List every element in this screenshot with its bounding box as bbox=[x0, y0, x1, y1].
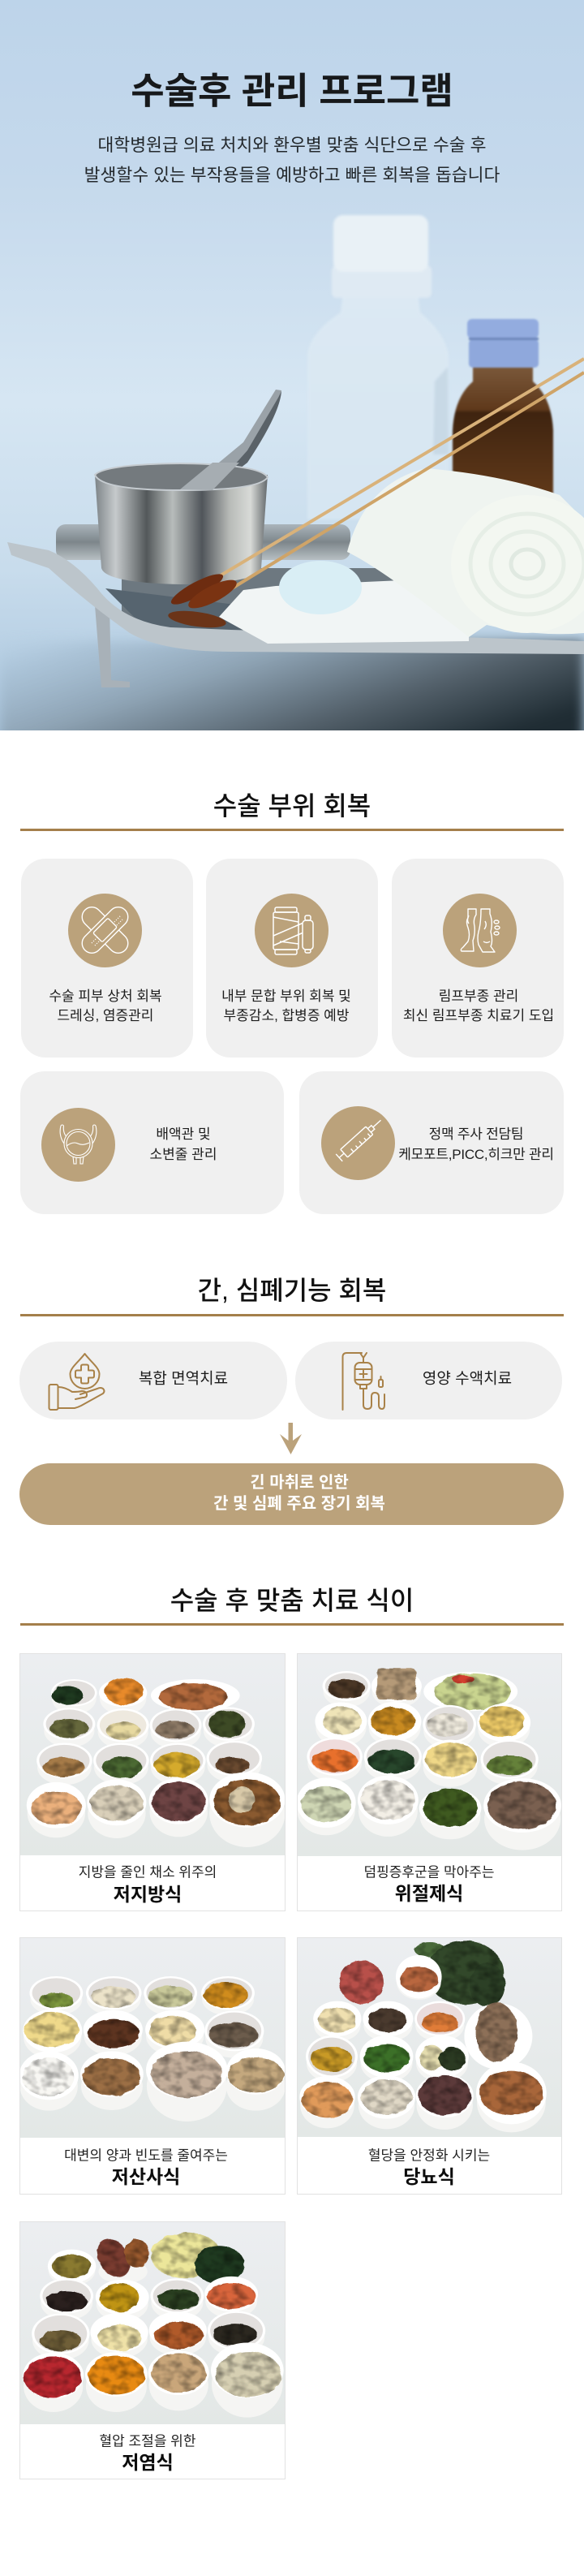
brown medicine bottle bbox=[453, 319, 553, 519]
icon: hand with blood drop bbox=[49, 1353, 105, 1411]
text: internal anastomosis recovery: 내부 문합 부위 회복 및 bbox=[221, 989, 351, 1004]
text: IV infusion care: 정맥 주사 전담팀 bbox=[429, 1126, 523, 1142]
text: lymphedema care: 최신 림프부종 치료기 도입 bbox=[403, 1008, 554, 1023]
cotton swabs bbox=[167, 359, 584, 631]
text: drain and catheter care bbox=[150, 1126, 217, 1162]
panel: low sodium diet bbox=[19, 2221, 286, 2479]
text: skin wound recovery bbox=[49, 989, 162, 1023]
callout text: 긴 마취로 인한 bbox=[250, 1474, 349, 1492]
text: internal anastomosis recovery: 부종감소, 합병증 예방 bbox=[224, 1008, 349, 1023]
name: low residue diet: 저산사식 bbox=[112, 2166, 180, 2187]
name: gastrectomy diet: 위절제식 bbox=[395, 1883, 463, 1904]
hero photo: surgical tray and dressing supplies bbox=[0, 0, 584, 730]
heading: customized therapeutic meals: 수술 후 맞춤 치료 식이 bbox=[170, 1586, 414, 1615]
panel: IV infusion care bbox=[299, 1071, 564, 1214]
panel: diabetic diet bbox=[297, 1937, 562, 2195]
photo: low residue meal bbox=[20, 1938, 285, 2138]
name: diabetic diet: 당뇨식 bbox=[403, 2166, 455, 2187]
text: drain and catheter care: 소변줄 관리 bbox=[150, 1147, 217, 1162]
panel: lymphedema care bbox=[392, 859, 564, 1058]
photo: diabetic meal bbox=[298, 1938, 561, 2137]
text: skin wound recovery: 드레싱, 염증관리 bbox=[58, 1008, 153, 1023]
caption: low fat: 지방을 줄인 채소 위주의 bbox=[79, 1865, 217, 1880]
panel: skin wound recovery bbox=[21, 859, 193, 1058]
icon: syringe bbox=[321, 1106, 395, 1180]
subtitle: 발생할수 있는 부작용들을 예방하고 빠른 회복을 돕습니다 bbox=[84, 165, 500, 185]
name: low sodium diet: 저염식 bbox=[122, 2452, 174, 2473]
icon: bladder bbox=[41, 1108, 115, 1182]
panel: drain and catheter care bbox=[20, 1071, 284, 1214]
icon: swollen legs bbox=[443, 894, 517, 967]
steel cup and tweezers bbox=[95, 390, 281, 584]
subtitle bbox=[84, 135, 500, 185]
arrow: down bbox=[280, 1423, 302, 1454]
name: low fat diet: 저지방식 bbox=[114, 1884, 182, 1905]
caption: low sodium: 혈압 조절을 위한 bbox=[100, 2433, 195, 2449]
caption: gastrectomy: 덤핑증후군을 막아주는 bbox=[363, 1865, 495, 1880]
text: IV infusion care bbox=[398, 1126, 554, 1162]
gauze pad bbox=[219, 578, 469, 644]
panel: low fat diet bbox=[19, 1653, 286, 1911]
icon: bandage roll bbox=[255, 894, 328, 967]
text: IV infusion care: 케모포트,PICC,히크만 관리 bbox=[398, 1147, 554, 1162]
icon: IV drip bbox=[342, 1352, 385, 1411]
callout: liver and cardiopulmonary organ recovery bbox=[19, 1463, 564, 1525]
photo: low sodium meal bbox=[20, 2222, 285, 2424]
bandage roll bbox=[347, 468, 584, 637]
panel: internal anastomosis recovery bbox=[206, 859, 378, 1058]
panel: immune therapy pill bbox=[19, 1342, 287, 1419]
photo: gastrectomy meal bbox=[298, 1654, 561, 1856]
text: immune therapy: 복합 면역치료 bbox=[139, 1370, 228, 1388]
panel: nutrition infusion pill bbox=[295, 1342, 562, 1419]
text: lymphedema care bbox=[403, 989, 554, 1023]
photo: low fat meal bbox=[20, 1654, 285, 1855]
cotton ball bbox=[279, 561, 362, 614]
caption: diabetic: 혈당을 안정화 시키는 bbox=[368, 2147, 490, 2164]
callout text bbox=[213, 1474, 385, 1513]
heading: surgical site recovery: 수술 부위 회복 bbox=[213, 791, 371, 821]
text: skin wound recovery: 수술 피부 상처 회복 bbox=[49, 989, 162, 1004]
panel: low residue diet bbox=[19, 1937, 286, 2195]
callout text: 간 및 심폐 주요 장기 회복 bbox=[213, 1495, 385, 1513]
panel: gastrectomy diet bbox=[297, 1653, 562, 1911]
metal tray bbox=[7, 519, 584, 687]
title: 수술후 관리 프로그램 bbox=[131, 70, 453, 112]
heading: liver and cardiopulmonary recovery: 간, 심폐기능 회복 bbox=[198, 1276, 386, 1305]
text: lymphedema care: 림프부종 관리 bbox=[439, 989, 518, 1004]
text: nutrition infusion: 영양 수액치료 bbox=[423, 1370, 512, 1388]
text: drain and catheter care: 배액관 및 bbox=[156, 1126, 211, 1142]
caption: low residue: 대변의 양과 빈도를 줄여주는 bbox=[64, 2147, 228, 2164]
text: internal anastomosis recovery bbox=[221, 989, 351, 1023]
white plastic bottle bbox=[307, 215, 449, 519]
subtitle: 대학병원급 의료 처치와 환우별 맞춤 식단으로 수술 후 bbox=[97, 135, 487, 155]
icon: bandage bbox=[68, 894, 142, 967]
